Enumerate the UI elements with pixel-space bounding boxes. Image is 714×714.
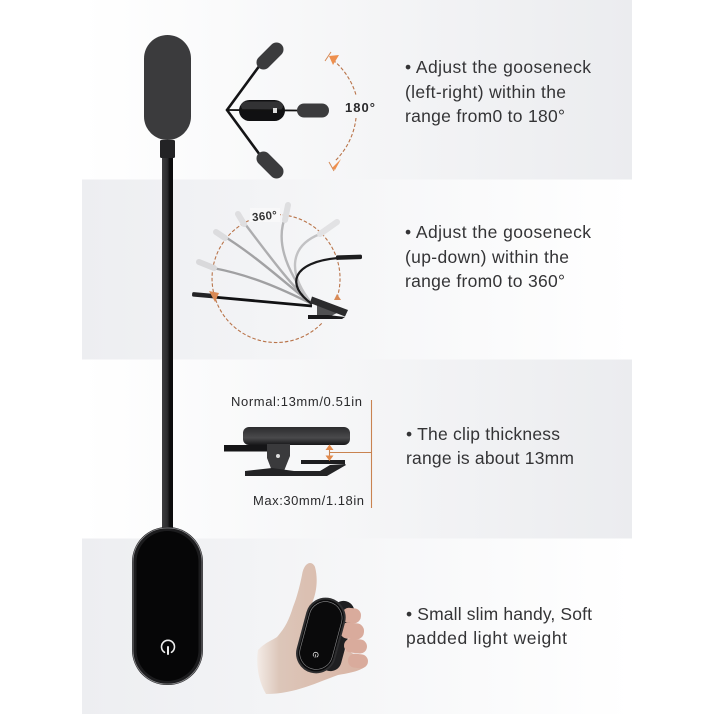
diagram: 360 degree gooseneck rotation — [192, 205, 362, 343]
angle label: 360° — [252, 210, 278, 224]
measurement arrows — [326, 444, 334, 461]
clip lower plate — [301, 460, 345, 464]
diagram: 180 degree gooseneck rotation — [227, 50, 375, 172]
arms — [227, 65, 260, 155]
black gooseneck up position — [296, 258, 338, 304]
arrowheads — [329, 55, 341, 170]
top head — [264, 50, 276, 62]
angle ticks — [325, 52, 334, 171]
measurement lines — [330, 400, 372, 508]
head collar — [160, 140, 175, 158]
panel: clip thickness background — [82, 360, 632, 538]
clip top body — [243, 427, 350, 445]
angle label: 180° — [345, 100, 375, 115]
icon: power button — [162, 640, 175, 654]
text: up-down adjustment: (up-down) within the — [405, 247, 569, 267]
label: maximum thickness: Max:30mm/1.18in — [253, 493, 364, 508]
text: up-down adjustment: range from0 to 360° — [405, 271, 565, 291]
clip body — [132, 527, 203, 685]
clip lower jaw — [245, 464, 346, 476]
bottom head — [264, 158, 276, 172]
panel: slim handy background — [82, 538, 632, 714]
dashed arc — [333, 60, 356, 161]
photo: clip held in hand — [257, 563, 369, 694]
text: small and handy: padded light weight — [406, 628, 567, 648]
gray gooseneck positions — [199, 205, 337, 304]
text: clip thickness — [406, 424, 574, 468]
gooseneck cable — [162, 155, 173, 531]
fingers — [339, 607, 369, 669]
lamp head — [144, 35, 191, 140]
small clip — [308, 296, 348, 319]
text: left-right adjustment: range from0 to 180° — [405, 106, 565, 126]
black gooseneck flat position — [213, 297, 312, 306]
middle head — [297, 104, 329, 118]
arrowheads — [209, 291, 341, 302]
white label backing — [250, 208, 280, 222]
clip front — [293, 594, 349, 677]
hinge pin — [276, 454, 280, 458]
back of clip — [317, 598, 357, 674]
text: left-right adjustment — [405, 57, 591, 126]
cable — [224, 445, 269, 452]
text: left-right adjustment: • Adjust the gooseneck — [405, 57, 591, 77]
text: left-right adjustment: (left-right) within the — [405, 82, 566, 102]
product: full lamp with gooseneck — [132, 35, 203, 685]
text: up-down adjustment: • Adjust the gooseneck — [405, 222, 591, 242]
diagram: clip thickness — [224, 394, 372, 508]
panel: up-down adjustment background — [82, 180, 632, 360]
text: up-down adjustment — [405, 222, 591, 291]
dashed circle — [212, 215, 340, 343]
middle arm — [227, 109, 298, 112]
panel: left-right adjustment background — [82, 0, 632, 180]
hand — [257, 563, 367, 694]
icon: small power button — [313, 652, 319, 658]
text: small and handy — [406, 604, 592, 648]
text: small and handy: • Small slim handy, Soft — [406, 604, 592, 624]
text: clip thickness: • The clip thickness — [406, 424, 560, 444]
clip hinge — [267, 444, 290, 471]
text: clip thickness: range is about 13mm — [406, 448, 574, 468]
clip body — [239, 100, 285, 121]
label: normal thickness: Normal:13mm/0.51in — [231, 394, 362, 409]
